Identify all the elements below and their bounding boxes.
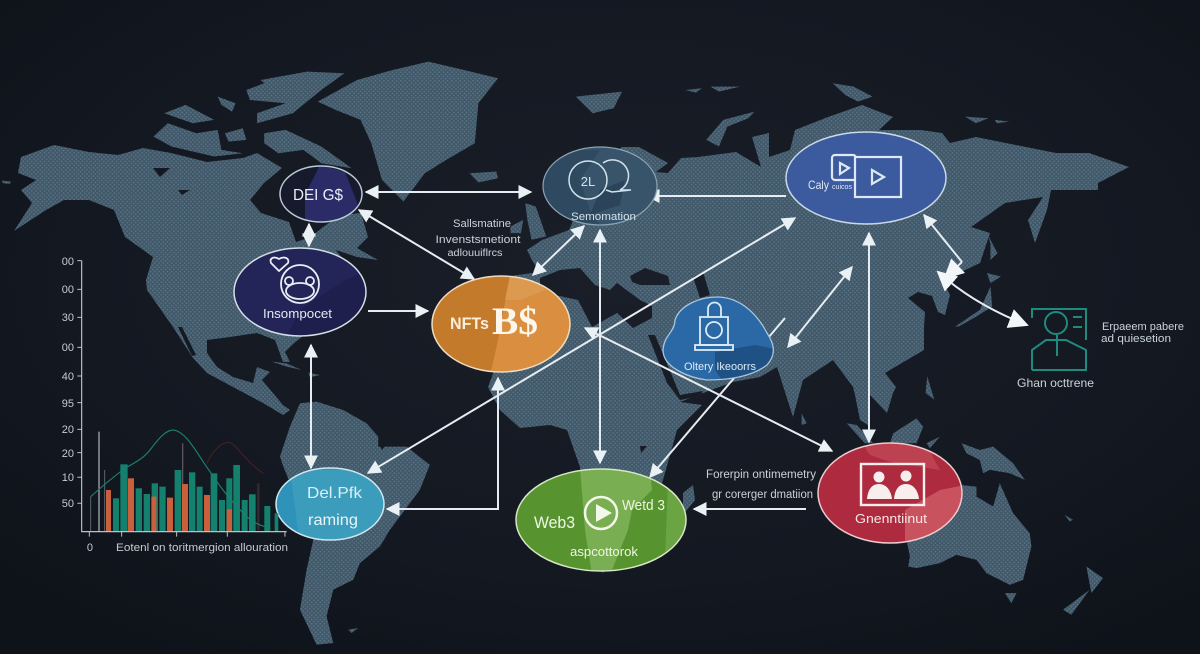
node: video: Caly: [808, 178, 829, 192]
bar chart: [62, 256, 288, 554]
callout: Forerpin: [706, 469, 816, 501]
callout: Sallsmatine: [436, 218, 520, 259]
callout: Forerpin: gr corerger dmatiion: [712, 489, 813, 501]
chart axis labels: 00: [62, 284, 74, 296]
node: Del.Pfk: Del.Pfk: [307, 485, 363, 502]
icon: play button: [585, 497, 617, 529]
label: Ghan octtrene: Ghan octtrene: [1017, 376, 1094, 390]
chart axis labels: 30: [62, 312, 74, 324]
chart axis labels: 10: [62, 472, 74, 484]
callout: Erpaeem: ad quiesetion: [1101, 333, 1171, 345]
node: security lock: [663, 297, 780, 385]
node: Web3: [516, 468, 690, 575]
callout: Erpaeem: Erpaeem pabere: [1102, 321, 1184, 333]
callout: Erpaeem: [1101, 321, 1184, 345]
icon: presentation people: [861, 464, 924, 505]
node: Semomation: [543, 147, 657, 225]
chart axis labels: 00: [62, 342, 74, 354]
node: Insompocet: Insompocet: [263, 306, 332, 321]
icon: person profile: [1032, 309, 1086, 370]
node: Web3: Web3: [534, 513, 575, 532]
node: DEI: [280, 165, 362, 225]
node: security lock: Oltery Ikeoorrs: [684, 361, 756, 373]
node: Web3: Wetd 3: [622, 497, 665, 514]
icon: padlock: [695, 302, 733, 350]
node: Semomation: 2L: [581, 174, 595, 189]
node: Gnenntiinut: Gnenntiinut: [855, 511, 927, 526]
node: Semomation: Semomation: [571, 211, 636, 223]
icon: video frames: [832, 155, 901, 197]
node: Del.Pfk: raming: [308, 512, 358, 529]
chart axis labels: 00: [62, 256, 74, 268]
node: Gnenntiinut: [818, 443, 965, 545]
icon: chat bubbles: [569, 160, 631, 199]
node: video: cuicos: [832, 184, 853, 191]
node: NFTs: NFTs: [450, 314, 489, 333]
chart axis labels: 95: [62, 398, 74, 410]
chart axis labels: 50: [62, 498, 74, 510]
chart axis labels: Eotenl on toritmergion allouration: [116, 542, 288, 554]
callout: Sallsmatine: adlouuiflrcs: [448, 248, 502, 259]
icon: face: [271, 258, 319, 303]
chart axis labels: [62, 256, 288, 554]
node: NFTs: [432, 276, 575, 375]
chart axis labels: 20: [62, 448, 74, 460]
chart axis labels: 40: [62, 371, 74, 383]
callout: Forerpin: Forerpin ontimemetry: [706, 469, 816, 481]
node: video: [786, 132, 946, 224]
node: Del.Pfk: [276, 468, 390, 545]
connection arrows: [309, 192, 1027, 509]
callout: Sallsmatine: Invenstsmetiont: [436, 234, 520, 246]
node: Web3: aspcottorok: [570, 544, 639, 559]
chart axis labels: 0: [87, 542, 93, 554]
node: NFTs: B$: [492, 300, 538, 343]
chart lines and bars: [77, 261, 287, 537]
node: DEI: DEI G$: [293, 187, 343, 204]
node: Insompocet: [234, 248, 370, 340]
callout: Sallsmatine: Sallsmatine: [453, 218, 511, 230]
chart axis labels: 20: [62, 424, 74, 436]
